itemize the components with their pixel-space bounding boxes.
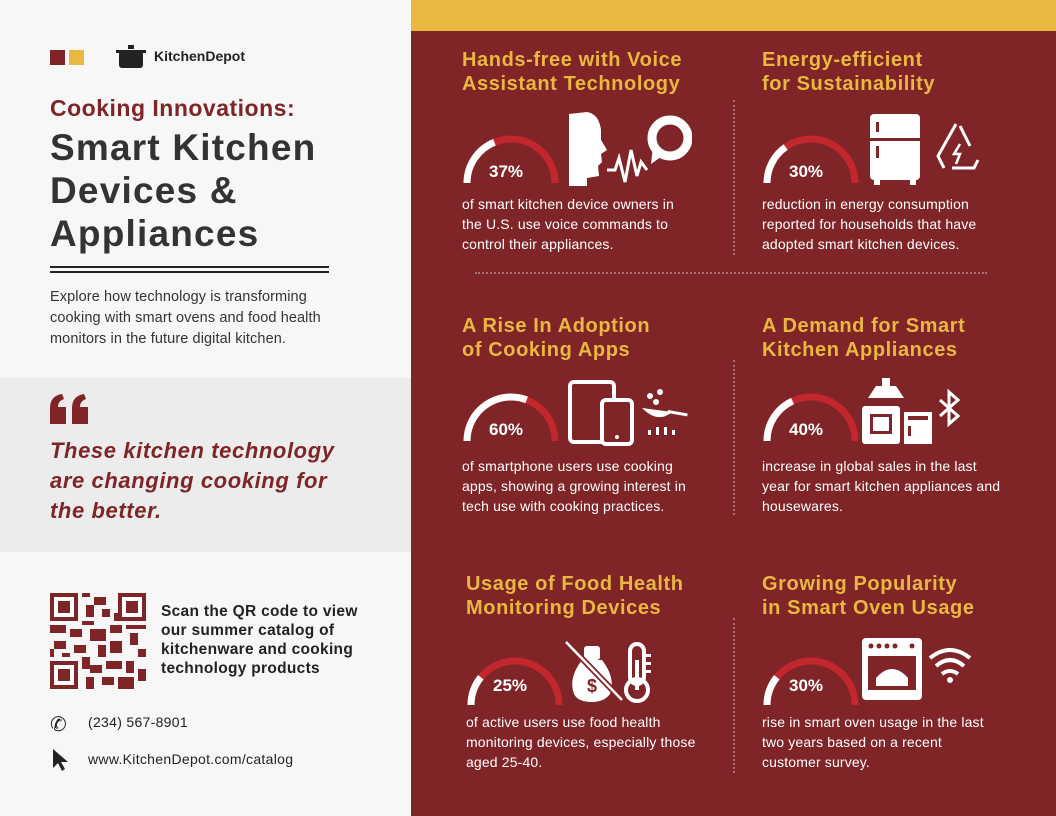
stat: energy efficient: Energy-efficient <box>762 49 923 71</box>
logo: KitchenDepot: KitchenDepot <box>154 48 245 64</box>
stat: cooking apps: of Cooking Apps <box>462 339 630 361</box>
stat: voice assistant: Hands-free with Voice <box>462 49 682 71</box>
stat: food health monitoring: Monitoring Devices <box>466 597 661 619</box>
top yellow strip <box>411 0 1056 31</box>
stat: smart appliances demand: 40% <box>789 420 823 439</box>
stat: energy efficient: reduction in energy consumption reported for households that have adopted smart kitchen devices. <box>762 196 976 252</box>
stat: voice assistant: 37% <box>489 162 523 181</box>
stat: smart oven: in Smart Oven Usage <box>762 597 975 619</box>
stat: voice assistant: of smart kitchen device owners in the U.S. use voice commands to control their appliances. <box>462 196 674 252</box>
stat: voice assistant <box>462 49 692 252</box>
stat: smart oven <box>762 573 984 770</box>
stat: cooking apps <box>462 315 688 514</box>
stat: smart oven: Growing Popularity <box>762 573 957 595</box>
stat: energy efficient: 30% <box>789 162 823 181</box>
stat: energy efficient <box>762 49 980 252</box>
stat: cooking apps: 60% <box>489 420 523 439</box>
stat: smart appliances demand: A Demand for Smart <box>762 315 965 337</box>
intro text: Explore how technology is transforming cooking with smart ovens and food health monitors in the future digital kitchen. <box>50 289 321 347</box>
icon: cursor <box>53 749 68 771</box>
stat: food health monitoring: 25% <box>493 676 527 695</box>
quote text: These kitchen technology are changing cooking for the better. <box>50 438 335 523</box>
stat: smart oven: 30% <box>789 676 823 695</box>
stat: food health monitoring: $ <box>587 676 597 696</box>
panel: statistics <box>411 0 1056 816</box>
stat: smart oven: rise in smart oven usage in the last two years based on a recent customer survey. <box>762 714 984 770</box>
quote band <box>0 378 411 552</box>
QR code <box>50 593 146 689</box>
stat: cooking apps: A Rise In Adoption <box>462 315 650 337</box>
stat: smart appliances demand: increase in global sales in the last year for smart kitchen appliances and housewares. <box>762 458 1000 514</box>
stat: smart appliances demand: Kitchen Appliances <box>762 339 958 361</box>
QR caption: Scan the QR code to view our summer catalog of kitchenware and cooking technology products <box>161 603 358 677</box>
panel: left intro <box>0 0 411 816</box>
stat: smart appliances demand <box>762 315 1000 514</box>
divider double line <box>50 266 329 273</box>
phone number: (234) 567-8901 <box>88 714 188 730</box>
stat: energy efficient: for Sustainability <box>762 73 935 95</box>
logo: KitchenDepot <box>116 45 245 68</box>
stat: food health monitoring: of active users use food health monitoring devices, especially those aged 25-40. <box>466 714 696 770</box>
icon: quote mark <box>50 394 88 424</box>
title: Cooking Innovations: <box>50 95 295 121</box>
stat: voice assistant: Assistant Technology <box>462 73 680 95</box>
stat: cooking apps: of smartphone users use cooking apps, showing a growing interest in tech use with cooking practices. <box>462 458 686 514</box>
logo squares <box>50 50 84 65</box>
stat: food health monitoring <box>466 573 696 770</box>
stat: food health monitoring: Usage of Food Health <box>466 573 684 595</box>
title: Smart Kitchen Devices & Appliances <box>50 127 316 254</box>
icon: phone: ✆ <box>50 714 67 736</box>
website: www.KitchenDepot.com/catalog <box>88 751 293 767</box>
